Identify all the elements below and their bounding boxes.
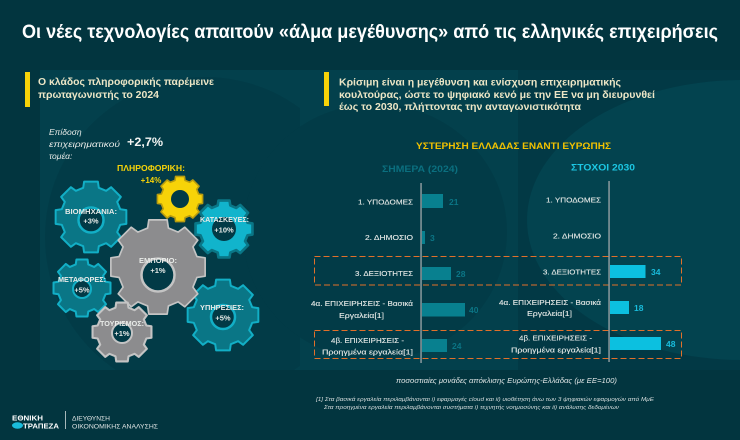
bar chart: targets 2030: 4α. ΕΠΙΧΕΙΡΗΣΕΙΣ - Βασικά (499, 298, 602, 307)
gear: ypiresies: +5% (215, 314, 231, 322)
gear: metafores: +5% (74, 286, 90, 294)
left heading (38, 77, 214, 101)
footnote (315, 396, 654, 411)
bar chart: targets 2030 (499, 181, 676, 362)
highlight box: skills (314, 256, 682, 285)
gear: biomichania: ΒΙΟΜΗΧΑΝΙΑ: (65, 207, 117, 216)
logo: national bank (12, 416, 59, 430)
chart title: ΥΣΤΕΡΗΣΗ ΕΛΛΑΔΑΣ ΕΝΑΝΤΙ ΕΥΡΩΠΗΣ (416, 141, 611, 152)
right heading: Κρίσιμη είναι η μεγέθυνση και ενίσχυση επιχειρηματικής (339, 78, 621, 88)
left heading: Ο κλάδος πληροφορικής παρέμεινε (38, 77, 214, 88)
bar chart: targets 2030: 48 (666, 339, 676, 349)
bar chart: today 2024 (311, 183, 479, 363)
gear: emporio: ΕΜΠΟΡΙΟ: (139, 256, 177, 265)
gear: pliroforiki: +14% (141, 176, 161, 185)
bar chart: today 2024: 24 (452, 341, 462, 351)
department name: ΔΙΕΥΘΥΝΣΗ (72, 416, 110, 422)
right heading accent bar (324, 72, 329, 106)
bar chart: today 2024: Εργαλεία[1] (339, 311, 384, 320)
gear: ypiresies (188, 280, 258, 350)
bar chart: today 2024: 4α. ΕΠΙΧΕΙΡΗΣΕΙΣ - Βασικά (311, 299, 414, 308)
total value: +2,7% (127, 135, 163, 149)
column heading: today: ΣΗΜΕΡΑ (2024) (382, 164, 458, 174)
right heading: κουλτούρας, ώστε το ψηφιακό κενό με την ΕΕ να μη διευρυνθεί (339, 90, 655, 101)
bar chart: today 2024: Προηγμένα εργαλεία[1] (322, 348, 413, 356)
panel: right gap chart (311, 72, 682, 363)
business sector performance label: επιχειρηματικού (49, 139, 120, 149)
gear: biomichania (56, 182, 126, 252)
unit note: ποσοστιαίες μονάδες απόκλισης Ευρώπης-Ελλάδας (με ΕΕ=100) (396, 376, 618, 385)
bar chart: targets 2030: Προηγμένα εργαλεία[1] (511, 346, 601, 354)
bar chart: today 2024: 3 (430, 233, 435, 243)
bar chart: targets 2030: 34 (651, 267, 661, 277)
gear: tourismos (93, 303, 151, 361)
bar chart: today 2024: 28 (456, 269, 466, 279)
bar chart: today 2024: 1. ΥΠΟΔΟΜΕΣ (358, 198, 413, 206)
department name (65, 411, 158, 430)
gear: metafores (54, 260, 110, 316)
gear: metafores: ΜΕΤΑΦΟΡΕΣ: (58, 275, 106, 284)
department name: ΟΙΚΟΝΟΜΙΚΗΣ ΑΝΑΛΥΣΗΣ (72, 424, 158, 430)
left heading: πρωταγωνιστής το 2024 (38, 90, 159, 101)
logo: national bank: ΤΡΑΠΕΖΑ (23, 424, 59, 430)
bar chart: targets 2030: 4β. ΕΠΙΧΕΙΡΗΣΕΙΣ - (519, 334, 593, 342)
bar chart: targets 2030: 18 (634, 303, 644, 313)
gear: emporio: +1% (150, 266, 166, 275)
bar chart: today 2024: 2. ΔΗΜΟΣΙΟ (365, 233, 413, 242)
right heading: έως το 2030, πλήττοντας την ανταγωνιστικότητα (339, 102, 582, 113)
gear: ypiresies: ΥΠΗΡΕΣΙΕΣ: (200, 303, 244, 312)
bar chart: today 2024: 4β. ΕΠΙΧΕΙΡΗΣΕΙΣ - (331, 336, 405, 345)
right heading (339, 78, 655, 113)
footnote: [1] Στα βασικά εργαλεία περιλαμβάνονται i) εφαρμογές cloud και ii) υιοθέτηση άνω των 3 ψηφιακών εφαρμογών από ΜμΕ (315, 396, 654, 403)
gear: kataskeves (196, 201, 252, 257)
business sector performance label (49, 127, 120, 161)
gear: kataskeves: ΚΑΤΑΣΚΕΥΕΣ: (200, 215, 249, 224)
gear: emporio (111, 220, 205, 314)
gear: pliroforiki: ΠΛΗΡΟΦΟΡΙΚΗ: (117, 164, 185, 173)
business sector performance label: τομέα: (49, 151, 73, 161)
bar chart: today 2024: 21 (449, 197, 459, 207)
business sector performance label: Επίδοση (49, 127, 82, 137)
left heading accent bar (25, 72, 30, 107)
bar chart: today 2024: 40 (469, 305, 479, 315)
panel: left sector performance (25, 72, 258, 361)
bar chart: targets 2030: 2. ΔΗΜΟΣΙΟ (553, 232, 601, 240)
gear: biomichania: +3% (83, 216, 99, 226)
gear: tourismos: +1% (114, 329, 130, 338)
bar chart: targets 2030: 3. ΔΕΞΙΟΤΗΤΕΣ (543, 268, 601, 276)
column heading: targets: ΣΤΟΧΟΙ 2030 (571, 162, 635, 172)
footnote: Στα προηγμένα εργαλεία περιλαμβάνονται συστήματα i) τεχνητής νοημοσύνης και ii) ανάλυσης δεδομένων (323, 404, 619, 411)
gear: tourismos: ΤΟΥΡΙΣΜΟΣ: (100, 319, 144, 328)
bar chart: today 2024: 3. ΔΕΞΙΟΤΗΤΕΣ (355, 269, 413, 278)
gear: pliroforiki (117, 164, 203, 222)
bar chart: targets 2030: 1. ΥΠΟΔΟΜΕΣ (546, 196, 601, 204)
logo: national bank: ΕΘΝΙΚΗ (12, 416, 43, 422)
gear: kataskeves: +10% (214, 226, 234, 234)
highlight box: advanced tools (314, 330, 682, 358)
bar chart: targets 2030: Εργαλεία[1] (527, 309, 572, 318)
